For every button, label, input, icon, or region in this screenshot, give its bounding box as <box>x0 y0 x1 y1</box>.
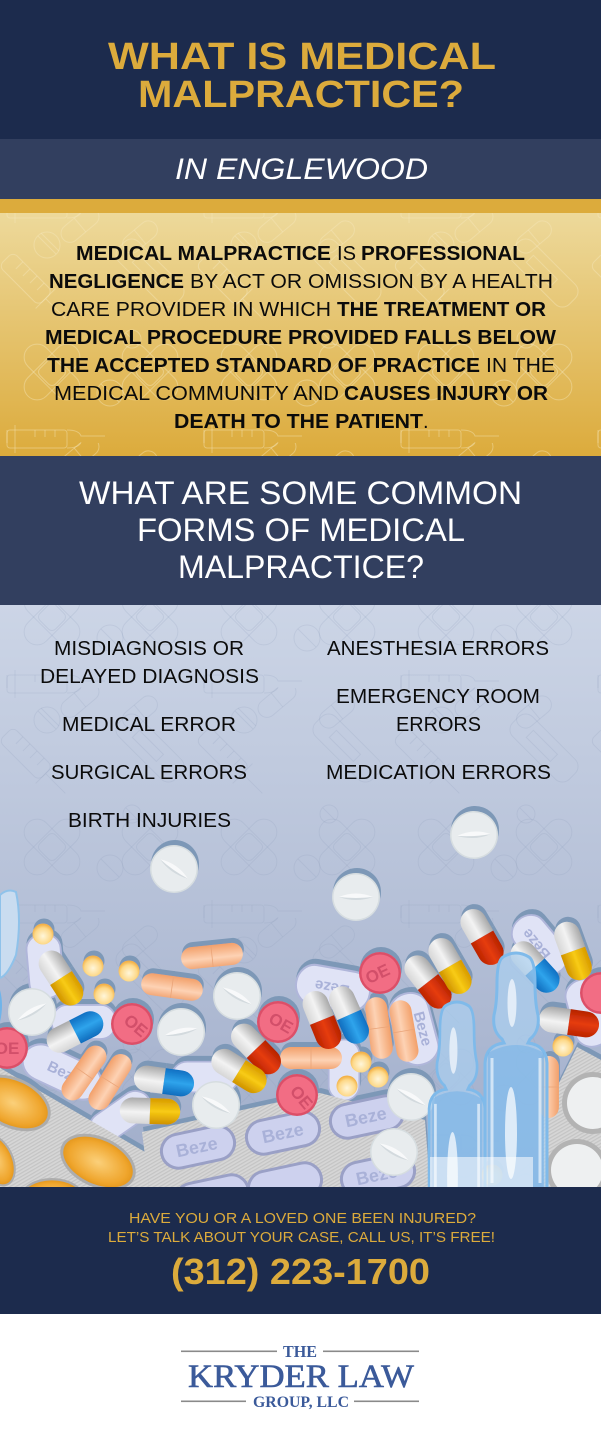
text block: malpractice definition: DEATH TO THE PATIENT <box>174 411 423 433</box>
list: right column of malpractice forms: EMERGENCY ROOM <box>336 686 540 708</box>
text block: malpractice definition: MEDICAL MALPRACTICE <box>76 243 331 265</box>
text: call to action lines: HAVE YOU OR A LOVED ONE BEEN INJURED? <box>129 1210 476 1227</box>
text block: malpractice definition: THE TREATMENT OR <box>337 299 547 321</box>
small blister shapes: Beze <box>44 1058 83 1088</box>
list: left column of malpractice forms: SURGICAL ERRORS <box>51 762 247 784</box>
list: left column of malpractice forms: DELAYED DIAGNOSIS <box>40 666 259 688</box>
foil blister sheets <box>0 1047 601 1220</box>
white scored tablets <box>0 810 499 1185</box>
small blister shapes: Beze <box>410 1010 435 1048</box>
logo: The Kryder Law Group, LLC <box>181 1342 419 1411</box>
foil blister sheets: Beze <box>343 1103 388 1131</box>
text block: malpractice definition: IS <box>337 243 356 265</box>
orange two-tone pills <box>57 942 559 1118</box>
list: left column of malpractice forms: MEDICAL ERROR <box>62 714 236 736</box>
panel: location subtitle band <box>0 139 601 199</box>
heading: what is medical malpractice: WHAT IS MEDICAL <box>108 36 496 78</box>
red tablets: OE <box>265 1009 296 1038</box>
list: right column of malpractice forms <box>326 638 551 784</box>
heading: what is medical malpractice: MALPRACTICE? <box>138 74 464 116</box>
text block: malpractice definition: NEGLIGENCE <box>49 271 184 293</box>
red tablets <box>0 952 601 1116</box>
panel: call to action <box>0 1187 601 1314</box>
text block: malpractice definition: IN THE <box>486 355 555 377</box>
panel: definition on gold background <box>0 199 601 456</box>
foil blister sheets: Beze <box>260 1119 305 1147</box>
list: left column of malpractice forms: BIRTH INJURIES <box>68 810 231 832</box>
panel: forms list and pills background <box>0 605 601 1187</box>
text block: malpractice definition: MEDICAL PROCEDURE PROVIDED FALLS BELOW <box>45 327 556 349</box>
text block: malpractice definition: BY ACT OR OMISSION BY A HEALTH <box>190 271 553 293</box>
text: call to action lines <box>108 1210 495 1246</box>
logo: The Kryder Law Group, LLC: THE <box>283 1342 317 1361</box>
heading: common forms of medical malpractice: FORMS OF MEDICAL <box>137 512 465 548</box>
foil blister sheets: Beze <box>174 1133 219 1161</box>
list: right column of malpractice forms: ERRORS <box>396 714 481 736</box>
text block: malpractice definition: THE ACCEPTED STANDARD OF PRACTICE <box>47 355 480 377</box>
small blister shapes: Beze <box>313 976 351 999</box>
glass ampoules <box>0 891 547 1235</box>
red tablets: OE <box>120 1011 151 1041</box>
list: right column of malpractice forms: ANESTHESIA ERRORS <box>327 638 549 660</box>
yellow round pills <box>32 924 574 1186</box>
illustration: pile of pills, capsules and ampoules <box>0 810 601 1235</box>
heading: common forms of medical malpractice: WHAT ARE SOME COMMON <box>79 475 522 511</box>
small blister shapes: Beze <box>519 925 554 963</box>
text block: malpractice definition: CAUSES INJURY OR <box>344 383 549 405</box>
list: left column of malpractice forms: MISDIAGNOSIS OR <box>54 638 244 660</box>
two-tone capsules <box>34 904 601 1125</box>
red tablets: OE <box>363 960 393 988</box>
subtitle: in Englewood: IN ENGLEWOOD <box>175 153 428 186</box>
text block: malpractice definition: . <box>423 411 429 433</box>
text block: malpractice definition: PROFESSIONAL <box>361 243 525 265</box>
logo: The Kryder Law Group, LLC: KRYDER LAW <box>188 1359 415 1395</box>
text block: malpractice definition <box>45 243 556 433</box>
text block: malpractice definition: CARE PROVIDER IN WHICH <box>51 299 331 321</box>
list: left column of malpractice forms <box>40 638 259 832</box>
red tablets: OE <box>286 1082 316 1113</box>
panel: title banner <box>0 0 601 139</box>
foil blister sheets: Beze <box>354 1161 399 1189</box>
text: phone number: (312) 223-1700 <box>171 1251 430 1292</box>
list: right column of malpractice forms: MEDICATION ERRORS <box>326 762 551 784</box>
small blister shapes <box>17 908 601 1149</box>
text block: malpractice definition: MEDICAL COMMUNITY AND <box>54 383 339 405</box>
heading: what is medical malpractice <box>108 36 496 116</box>
heading: common forms of medical malpractice <box>79 475 522 585</box>
logo: The Kryder Law Group, LLC: GROUP, LLC <box>253 1394 349 1411</box>
panel: common forms heading band <box>0 456 601 605</box>
heading: common forms of medical malpractice: MALPRACTICE? <box>178 549 424 585</box>
text: call to action lines: LET’S TALK ABOUT YOUR CASE, CALL US, IT’S FREE! <box>108 1229 495 1246</box>
